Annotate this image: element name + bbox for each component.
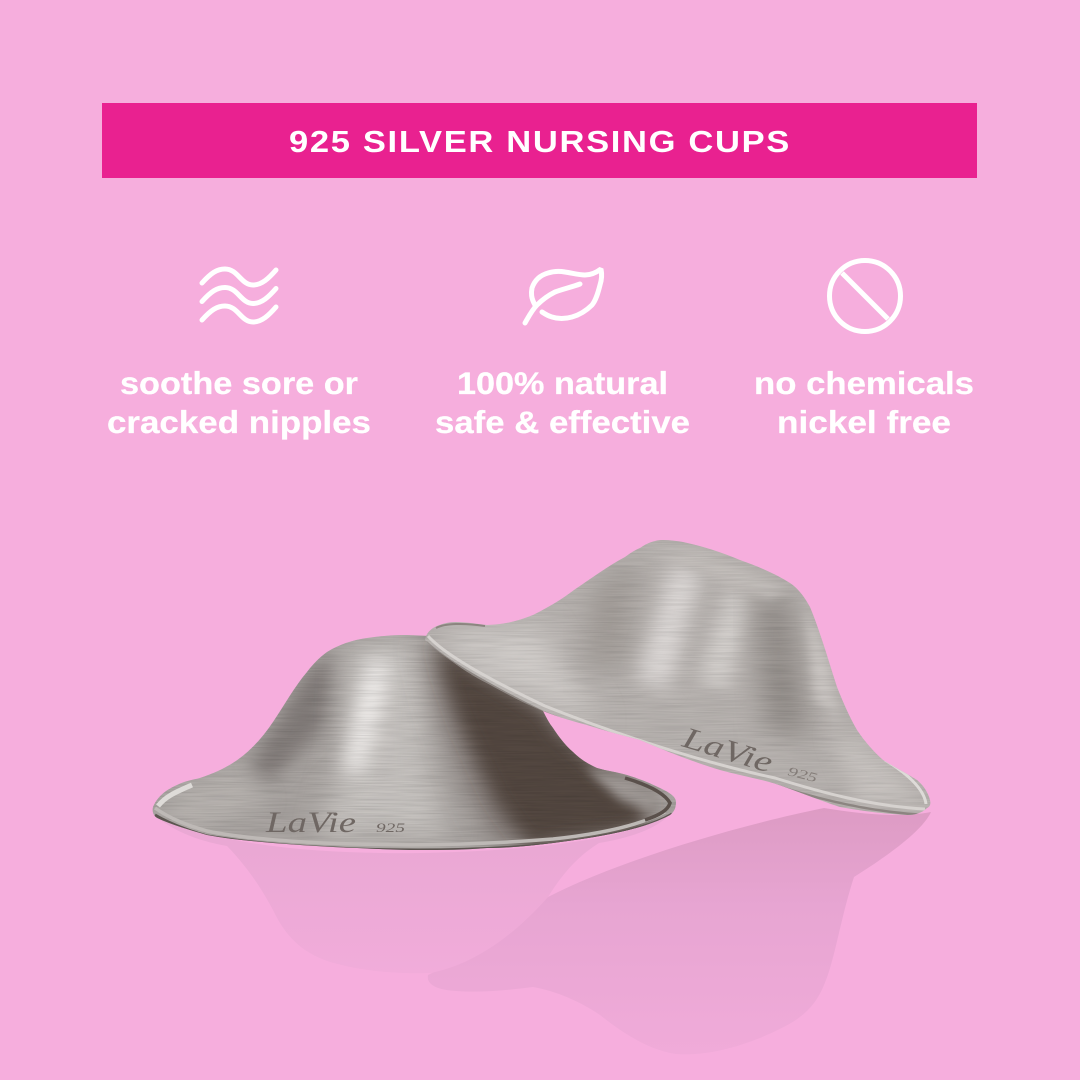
label line: cracked nipples: cracked nipples (107, 404, 371, 440)
label: natural: 100% natural (457, 365, 668, 401)
left cup rim (155, 778, 672, 850)
label: soothe: soothe sore or (120, 365, 358, 401)
right cup engraving (678, 721, 820, 785)
label: no chemicals: no chemicals (754, 365, 974, 401)
label line: nickel free: nickel free (777, 404, 951, 440)
left cup 925 mark: 925 (376, 820, 406, 835)
title banner (102, 103, 977, 178)
title text: 925 SILVER NURSING CUPS (289, 124, 791, 159)
reflection: right cup (428, 808, 931, 1054)
infographic canvas (102, 103, 977, 1020)
label: no chemicals (754, 365, 974, 440)
left cup engraving (265, 806, 406, 839)
right cup rim (426, 624, 926, 815)
label: natural (435, 365, 690, 440)
reflection: left cup (158, 806, 676, 973)
icon: leaf (525, 269, 602, 323)
label: soothe (107, 365, 371, 440)
right cup (420, 530, 940, 825)
icon: no symbol (830, 260, 900, 332)
label line: safe and effective: safe & effective (435, 404, 690, 440)
left cup (152, 635, 676, 850)
right cup engraving: LaVie (678, 721, 777, 780)
left cup engraving: LaVie (265, 806, 356, 839)
icon: waves (202, 269, 276, 322)
right cup 925 mark: 925 (786, 763, 820, 785)
